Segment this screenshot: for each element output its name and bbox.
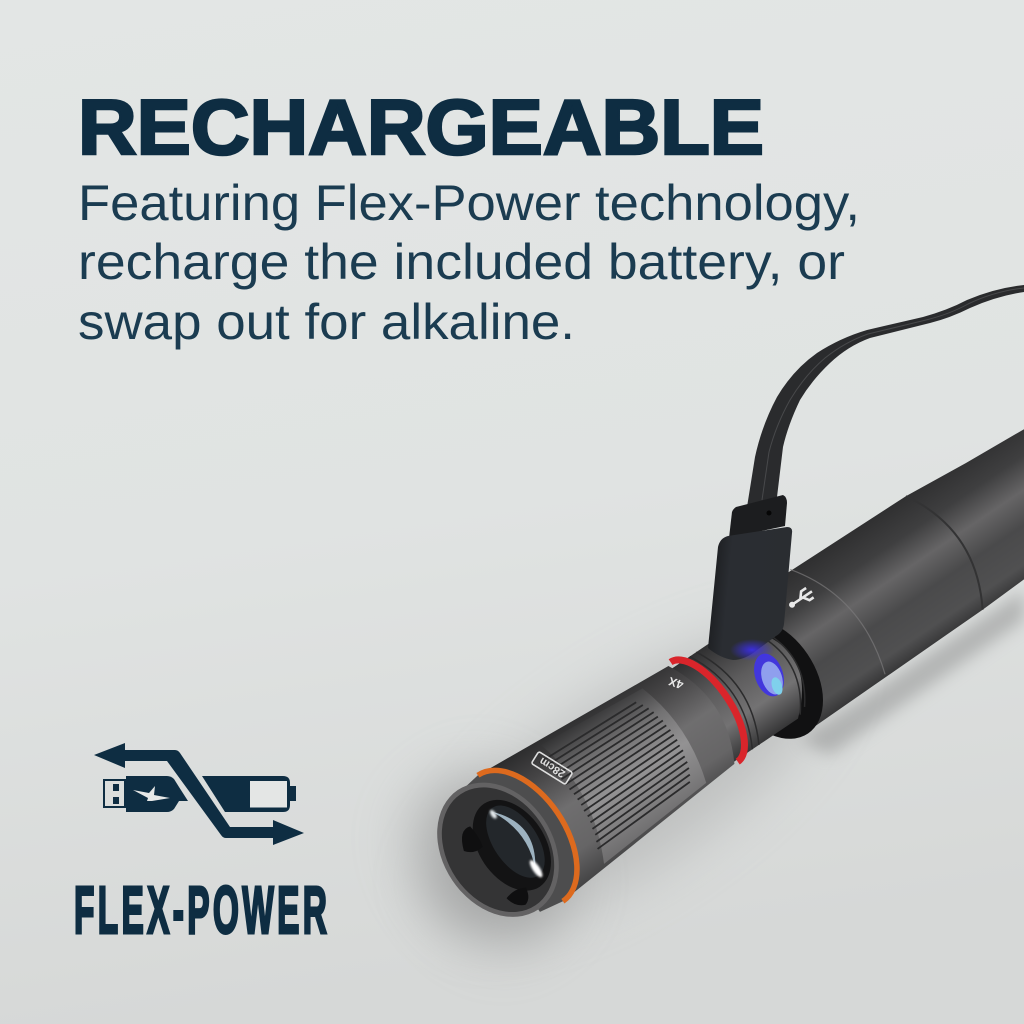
- indicator button: [749, 650, 789, 700]
- lens crescent: [492, 802, 546, 871]
- connector housing: [708, 527, 792, 660]
- charging cable: [747, 285, 1024, 507]
- zoom label 4X: 4X: [667, 674, 685, 692]
- bezel notches: [454, 819, 534, 917]
- bezel interior: [419, 766, 577, 934]
- orange ring: [478, 750, 600, 901]
- flashlight: [412, 384, 1024, 946]
- lens: [474, 795, 557, 888]
- rim badge: 28cm: [537, 754, 568, 780]
- usb connector: [708, 495, 792, 661]
- front band: [457, 750, 600, 915]
- knurled grip: [529, 675, 719, 864]
- description text: [78, 175, 860, 350]
- collar opening: [698, 599, 844, 758]
- zoom head: [478, 644, 758, 901]
- blue glow: [730, 639, 774, 661]
- flashlight main body: [687, 388, 1024, 759]
- title: RECHARGEABLE: [78, 83, 764, 171]
- description text: recharge the included battery, or: [78, 234, 845, 290]
- icon label: FLEX-POWER: [74, 874, 327, 948]
- strain relief: [729, 495, 787, 538]
- description text: Featuring Flex-Power technology,: [78, 175, 860, 231]
- inner reflector: [457, 785, 567, 905]
- rim badge: [531, 751, 573, 785]
- lens highlights: [489, 805, 545, 881]
- icon: usb plug: [104, 776, 188, 812]
- description text: swap out for alkaline.: [78, 294, 575, 350]
- icon: battery: [202, 776, 296, 812]
- flashlight shadows: [382, 581, 1024, 979]
- connector port hole: [766, 510, 772, 516]
- red ring: [671, 647, 760, 762]
- usb symbol: [786, 586, 815, 611]
- front bezel: [412, 759, 584, 940]
- icon: flex-power usb and battery: [94, 743, 304, 845]
- arrow: two-way flex path: [94, 743, 304, 845]
- neck ribs: [684, 609, 823, 753]
- neck: [667, 609, 823, 764]
